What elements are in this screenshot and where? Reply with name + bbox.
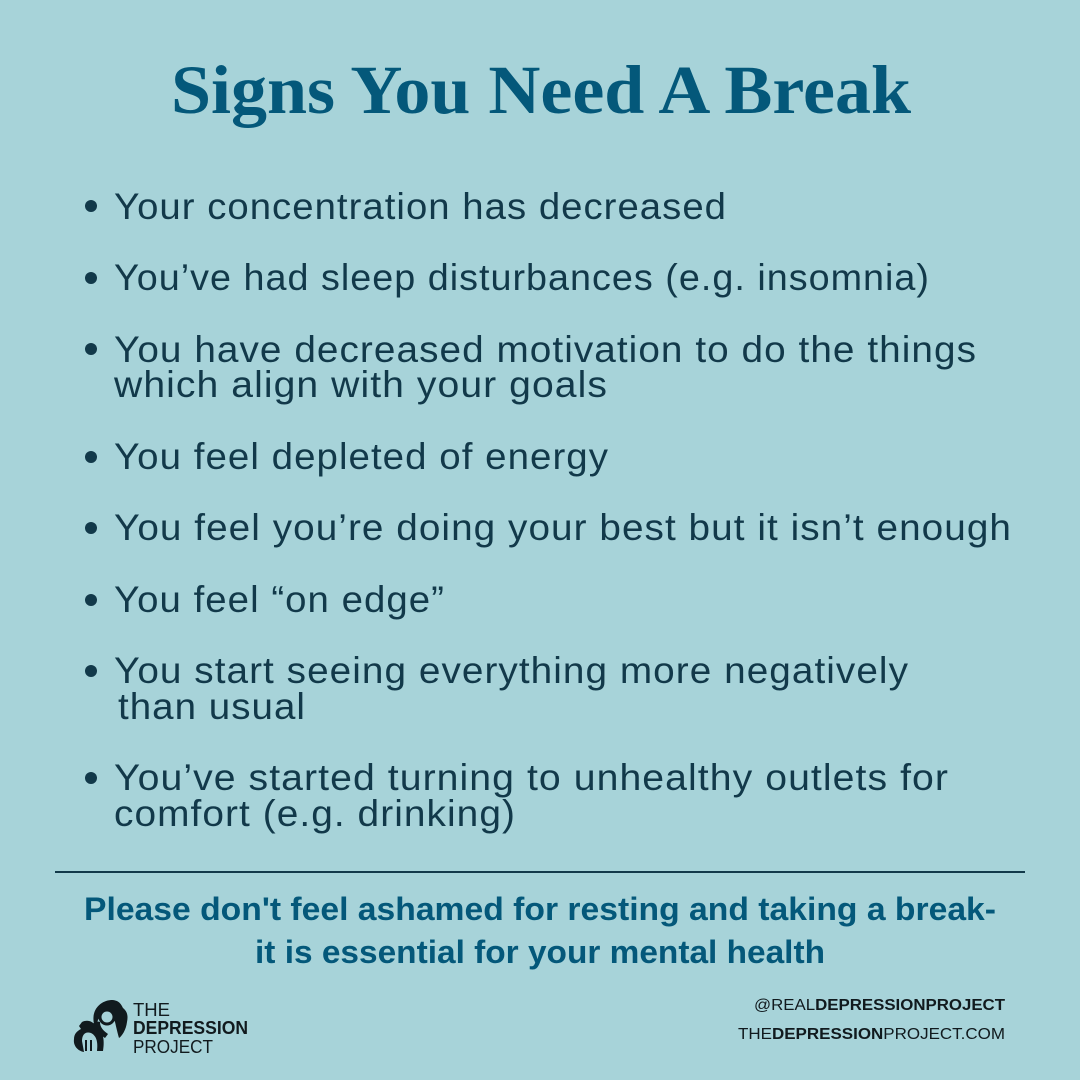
bullet: sleep: You’ve had sleep disturbances (e.g. insomnia): [114, 257, 930, 298]
bullet: negativity: than usual: [118, 686, 306, 727]
bullet: on edge: You feel “on edge”: [114, 579, 445, 620]
logo wordmark: PROJECT: [133, 1037, 213, 1057]
icon: logo mark: [74, 1000, 128, 1052]
bullet: negativity: You start seeing everything more negatively: [114, 650, 909, 691]
bullet: motivation: which align with your goals: [113, 364, 608, 405]
social handle: @REALDEPRESSIONPROJECT: [754, 997, 1005, 1014]
bullet list: [85, 186, 1012, 834]
logo wordmark: THE: [133, 1000, 170, 1020]
logo wordmark: DEPRESSION: [133, 1018, 248, 1038]
bullet: energy: You feel depleted of energy: [114, 436, 609, 477]
bullet: negativity: [85, 650, 909, 727]
closing message: [84, 891, 996, 970]
website: THEDEPRESSION PROJECT.COM: [738, 1026, 1005, 1043]
bullet: not enough: You feel you’re doing your best but it isn’t enough: [114, 507, 1012, 548]
bullet: motivation: You have decreased motivation to do the things: [114, 329, 977, 370]
bullet: motivation: [85, 329, 977, 405]
bullet: outlets: [85, 757, 949, 834]
logo wordmark: [133, 1000, 248, 1057]
title: Signs You Need A Break: [171, 52, 912, 128]
bullet: outlets: You’ve started turning to unhealthy outlets for: [114, 757, 949, 798]
logo: [74, 1000, 248, 1057]
bullet: outlets: comfort (e.g. drinking): [114, 793, 516, 834]
closing message: Please don't feel ashamed for resting and taking a break-: [84, 891, 996, 927]
bullet: concentration: Your concentration has decreased: [114, 186, 727, 227]
closing message: it is essential for your mental health: [255, 934, 825, 970]
